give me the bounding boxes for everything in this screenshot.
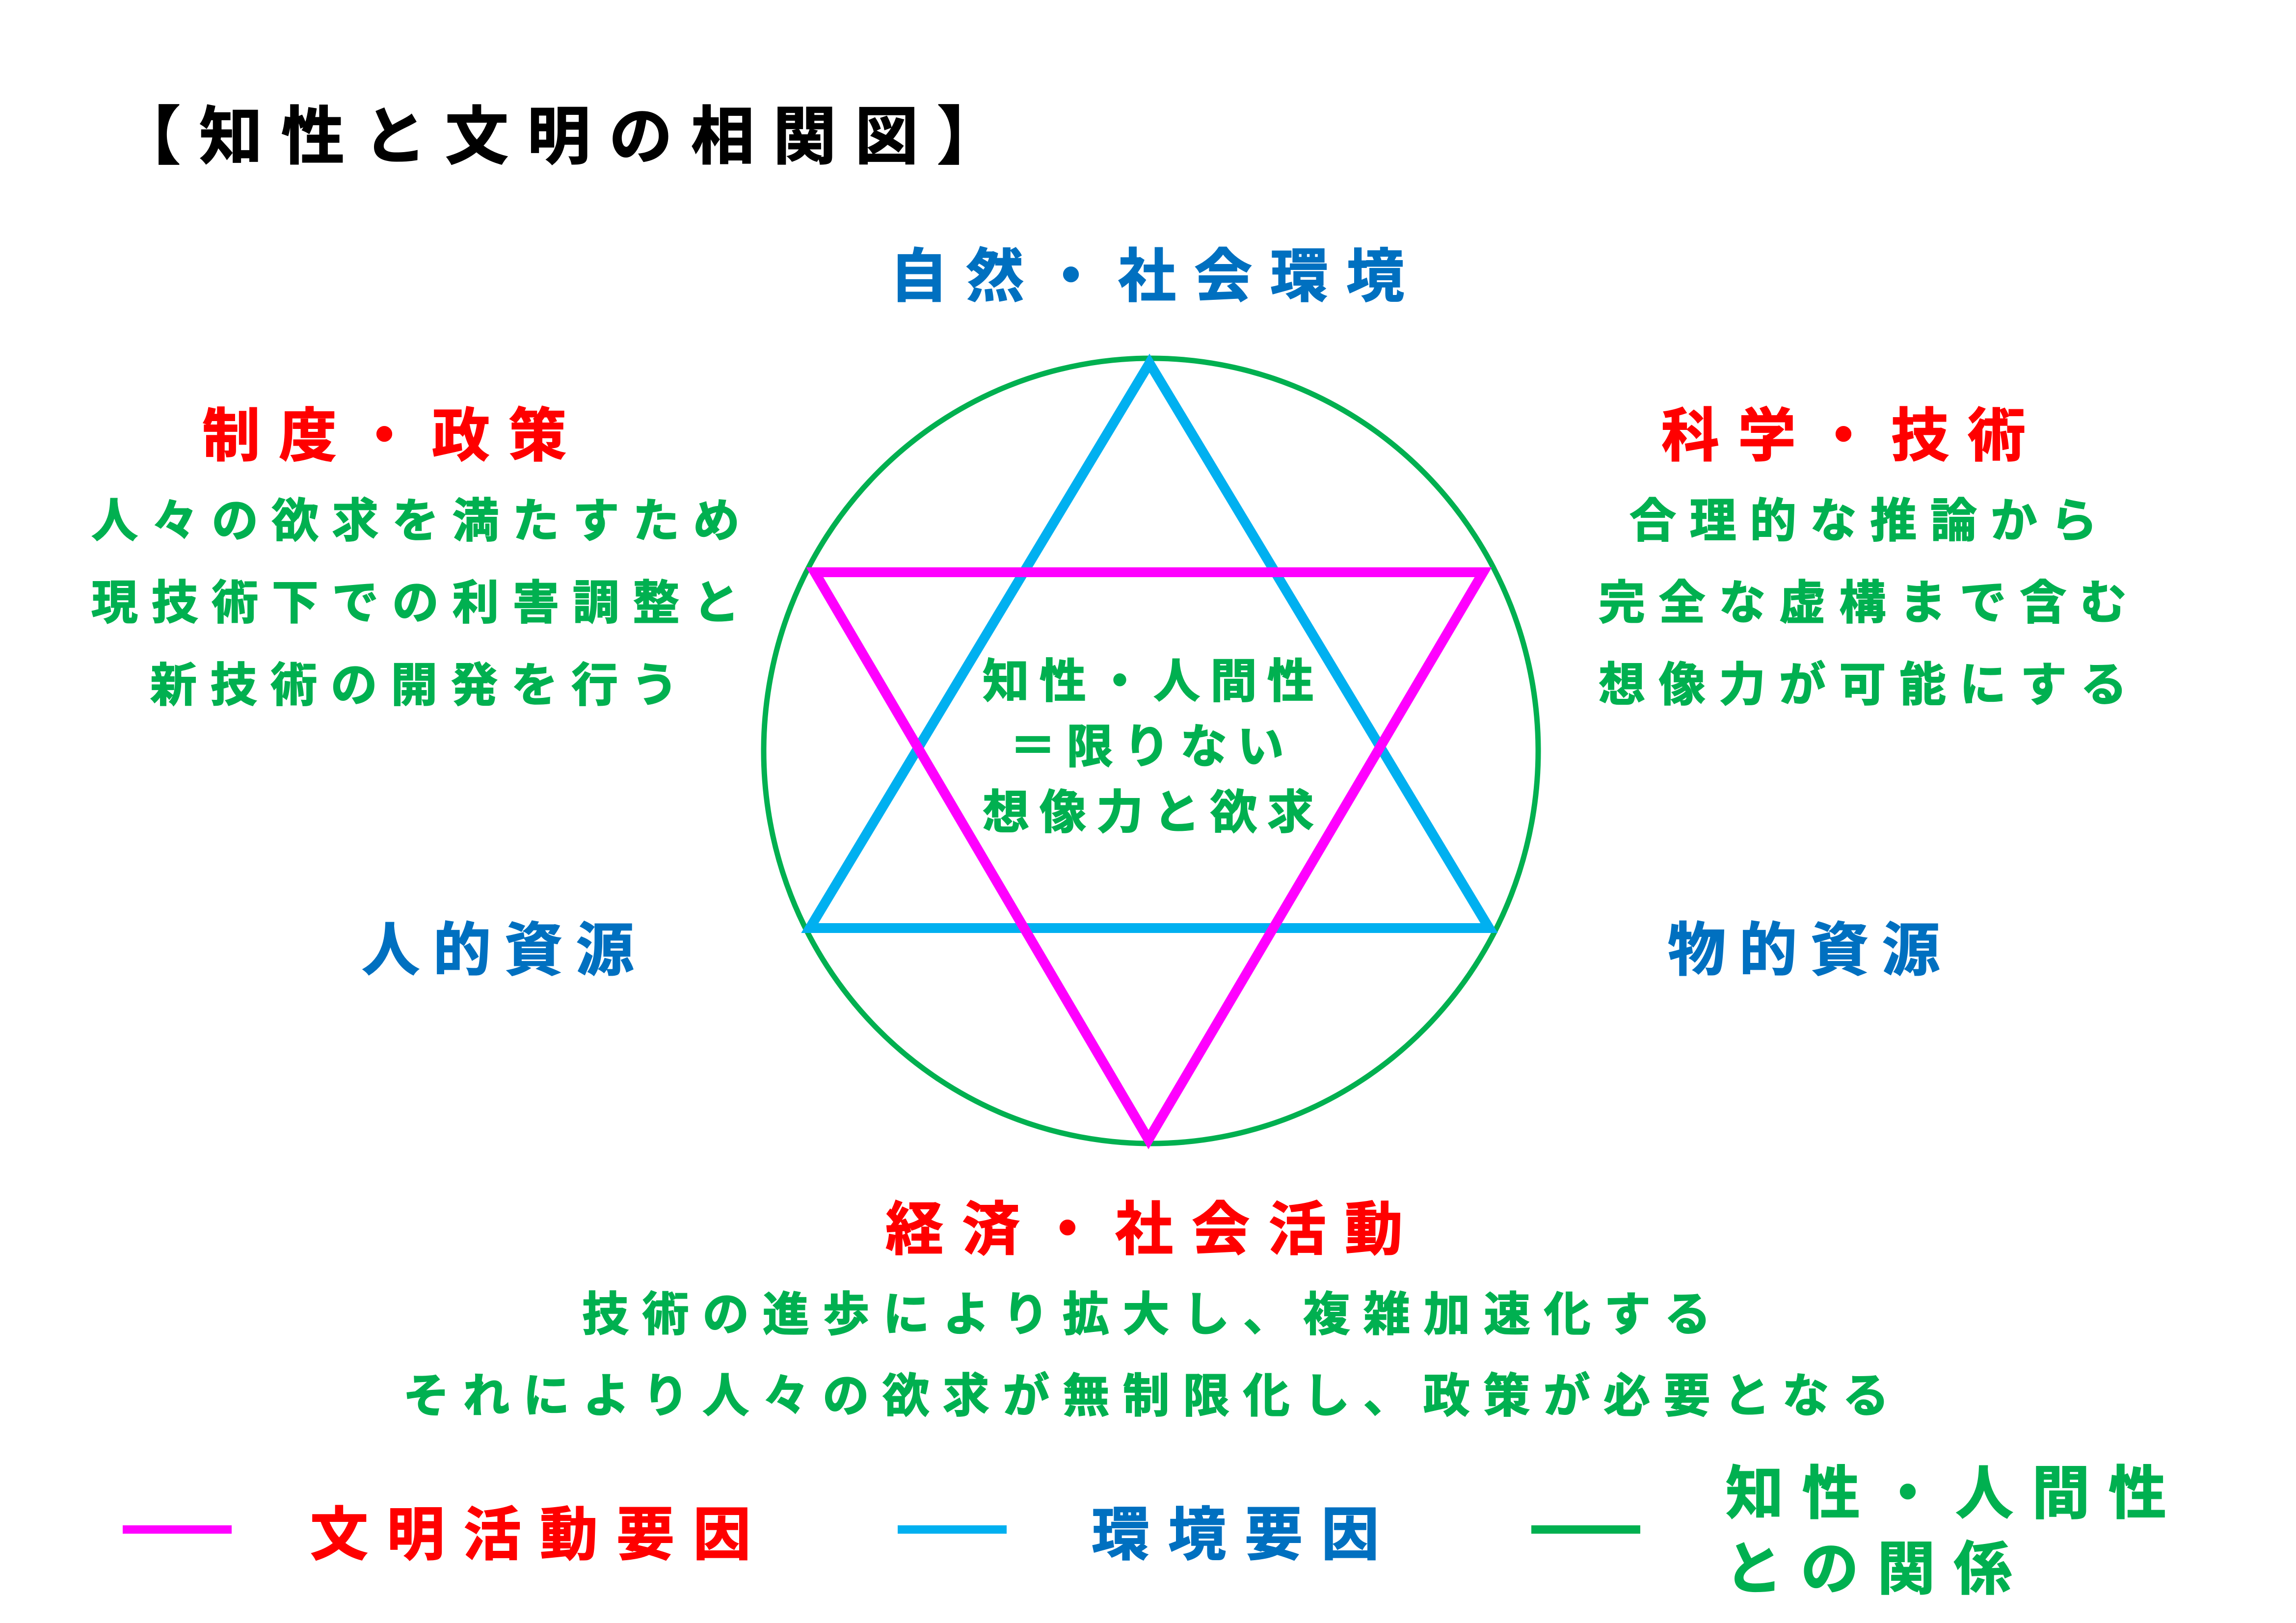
diagram: circle with two triangles [764, 358, 1538, 1144]
triangle: civilization activity factors [815, 572, 1483, 1140]
legend label: environmental factors: 環境要因 [1092, 1503, 1398, 1568]
text block: science and technology description: 完全な虚構まで含む [1599, 577, 2140, 629]
label: human resources: 人的資源 [362, 918, 647, 983]
text block: institutions and policy description [91, 495, 753, 712]
text block: science and technology description: 想像力が可能にする [1599, 659, 2140, 711]
text block: economic and social activity description: それにより人々の欲求が無制限化し、政策が必要となる [403, 1370, 1902, 1422]
heading: economic and social activity: 経済・社会活動 [885, 1197, 1421, 1262]
text block: institutions and policy description: 新技術の開発を行う [150, 660, 692, 712]
legend label: relation with intellect and humanity [1725, 1462, 2185, 1602]
label: natural and social environment: 自然・社会環境 [890, 244, 1422, 309]
legend line: relation with intellect and humanity [1531, 1525, 1640, 1534]
legend label: civilization activity factors: 文明活動要因 [310, 1503, 770, 1568]
text block: economic and social activity description: 技術の進歩により拡大し、複雑加速化する [582, 1289, 1725, 1341]
center text [983, 656, 1324, 839]
legend label: relation with intellect and humanity: との関係 [1725, 1537, 2030, 1602]
legend [123, 1462, 2185, 1602]
heading: science and technology: 科学・技術 [1661, 404, 2044, 469]
panel: economic and social activity [403, 1197, 1902, 1422]
label: material resources: 物的資源 [1668, 918, 1953, 983]
center text: ＝限りない [1010, 721, 1294, 773]
text block: science and technology description [1599, 495, 2140, 711]
legend line: civilization activity factors [123, 1525, 232, 1534]
heading: institutions and policy: 制度・政策 [202, 404, 585, 469]
text block: economic and social activity description [403, 1289, 1902, 1422]
circle: intellect and humanity relation [764, 358, 1538, 1144]
triangle: environmental factors [810, 363, 1489, 928]
text block: institutions and policy description: 人々の欲求を満たすため [91, 495, 753, 547]
text block: institutions and policy description: 現技術下での利害調整と [91, 577, 753, 629]
panel: institutions and policy [91, 404, 753, 712]
center text: 想像力と欲求 [983, 787, 1324, 839]
legend line: environmental factors [898, 1525, 1007, 1534]
title: 【知性と文明の相関図】 [117, 102, 1019, 172]
panel: science and technology [1599, 404, 2140, 711]
text block: science and technology description: 合理的な推論から [1629, 495, 2111, 547]
legend label: relation with intellect and humanity: 知性・人間性 [1726, 1462, 2185, 1526]
center text: 知性・人間性 [983, 656, 1324, 708]
